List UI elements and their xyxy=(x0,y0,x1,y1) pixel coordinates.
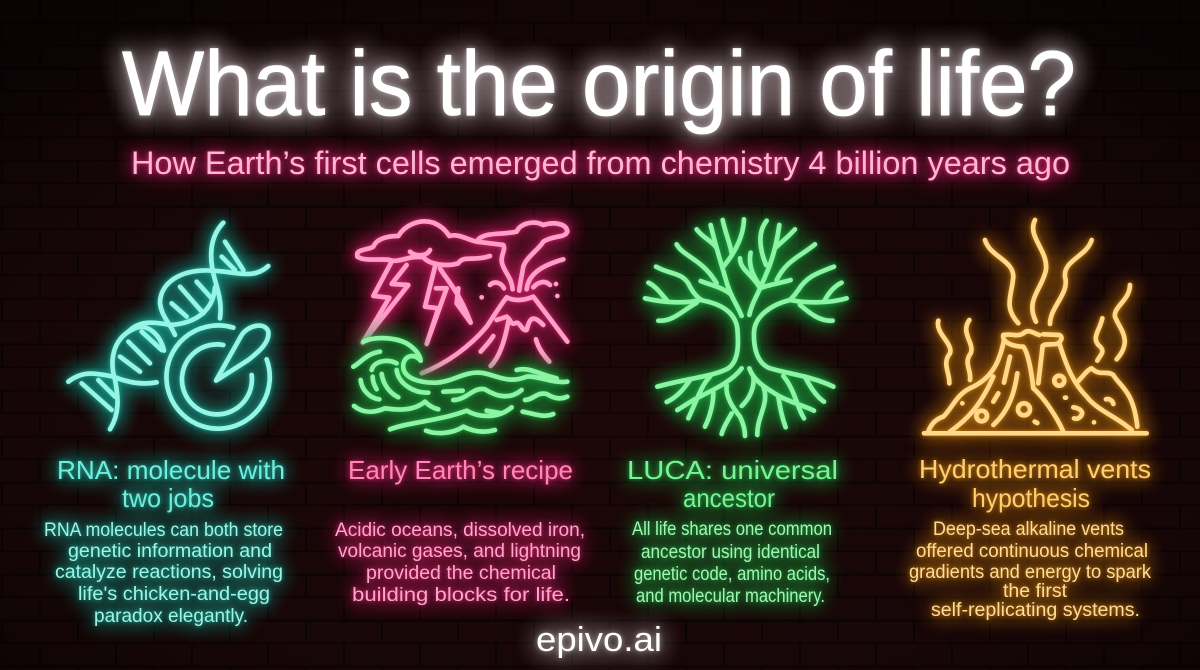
body text: Early Earth xyxy=(335,519,585,606)
body text: Early Earth: Acidic oceans, dissolved iron, xyxy=(335,519,585,541)
subtitle: How Earth’s first cells emerged from chemistry 4 billion years ago xyxy=(131,145,1070,181)
body text: LUCA: genetic code, amino acids, xyxy=(634,563,830,585)
body text: RNA xyxy=(44,519,283,627)
icon: hydrothermal vent with rising plumes xyxy=(924,220,1147,433)
body text: Hydrothermal vents: self-replicating systems. xyxy=(931,599,1140,621)
body text: RNA: genetic information and xyxy=(68,540,272,562)
body text: RNA: paradox elegantly. xyxy=(94,605,248,627)
icon: DNA helix with mortar and pestle xyxy=(68,223,270,429)
icon: storm clouds, lightning and volcano xyxy=(357,221,567,373)
body text: LUCA: All life shares one common xyxy=(632,518,832,540)
heading: Early Earth: Early Earth’s recipe xyxy=(348,455,573,485)
body text: Hydrothermal vents: gradients and energy to spark xyxy=(909,561,1151,583)
heading: Hydrothermal vents xyxy=(919,454,1151,513)
body text: Hydrothermal vents xyxy=(909,518,1151,621)
panel: Hydrothermal vents xyxy=(909,220,1151,621)
heading: RNA xyxy=(57,455,285,513)
footer brand: epivo.ai xyxy=(536,621,662,659)
body text: RNA: life's chicken-and-egg xyxy=(78,583,270,605)
icon: tree of life with roots xyxy=(645,219,847,436)
heading: Hydrothermal vents: hypothesis xyxy=(972,483,1090,513)
body text: LUCA: and molecular machinery. xyxy=(636,585,825,607)
body text: Hydrothermal vents: offered continuous chemical xyxy=(916,540,1148,562)
body text: Early Earth: provided the chemical xyxy=(366,562,556,584)
panel: RNA xyxy=(44,223,285,627)
heading: LUCA: LUCA: universal xyxy=(627,455,838,485)
body text: RNA: RNA molecules can both store xyxy=(44,519,283,541)
body text: LUCA xyxy=(632,518,832,607)
heading: RNA: two jobs xyxy=(122,483,214,513)
body text: Early Earth: volcanic gases, and lightning xyxy=(338,540,581,562)
body text: Early Earth: building blocks for life. xyxy=(352,584,570,606)
body text: LUCA: ancestor using identical xyxy=(641,541,820,563)
body text: Hydrothermal vents: the first xyxy=(1003,580,1068,602)
icon: green ocean waves xyxy=(353,338,567,433)
panel: Early Earth xyxy=(335,221,585,606)
heading: LUCA: ancestor xyxy=(683,483,775,513)
title: What is the origin of life? xyxy=(122,33,1076,135)
heading: LUCA xyxy=(627,455,838,513)
heading: RNA: RNA: molecule with xyxy=(57,455,285,485)
panel: LUCA xyxy=(627,219,847,607)
heading: Hydrothermal vents: Hydrothermal vents xyxy=(919,454,1151,484)
body text: Hydrothermal vents: Deep-sea alkaline vents xyxy=(933,518,1124,540)
body text: RNA: catalyze reactions, solving xyxy=(55,561,283,583)
